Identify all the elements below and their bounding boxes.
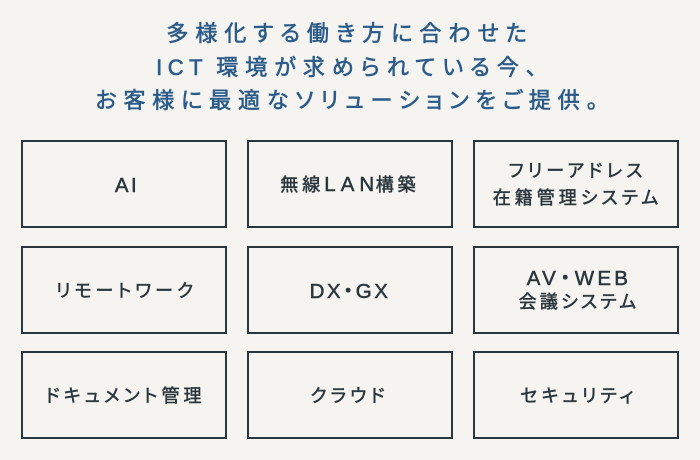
title <box>96 21 604 113</box>
panel: AI: AI <box>115 174 139 196</box>
panel: free address <box>473 140 679 228</box>
title: 多様化する働き方に合わせた <box>166 21 534 46</box>
panel: cloud <box>247 351 453 439</box>
panel: AV WEB conference: AV・WEB <box>527 266 631 290</box>
title: お客様に最適なソリューションをご提供。 <box>96 88 604 113</box>
panel: remote work <box>21 246 227 334</box>
panel: wireless LAN <box>247 140 453 228</box>
panel: security <box>473 351 679 439</box>
title: ICT 環境が求められている今、 <box>156 54 544 80</box>
panel: AV WEB conference <box>473 246 679 334</box>
panel: cloud: クラウド <box>310 386 389 406</box>
panel: remote work: リモートワーク <box>56 280 197 300</box>
panel: DX GX: DX・GX <box>310 280 390 302</box>
panel: wireless LAN: 無線LAN構築 <box>280 173 420 196</box>
panel: document management: ドキュメント管理 <box>46 386 205 406</box>
panel: security: セキュリティ <box>520 386 638 406</box>
panel: AV WEB conference: 会議システム <box>519 292 639 312</box>
panel: AI <box>21 140 227 228</box>
panel: free address: フリーアドレス <box>509 161 646 181</box>
panel: DX GX <box>247 246 453 334</box>
panel: document management <box>21 351 227 439</box>
panel: free address: 在籍管理システム <box>493 188 662 208</box>
